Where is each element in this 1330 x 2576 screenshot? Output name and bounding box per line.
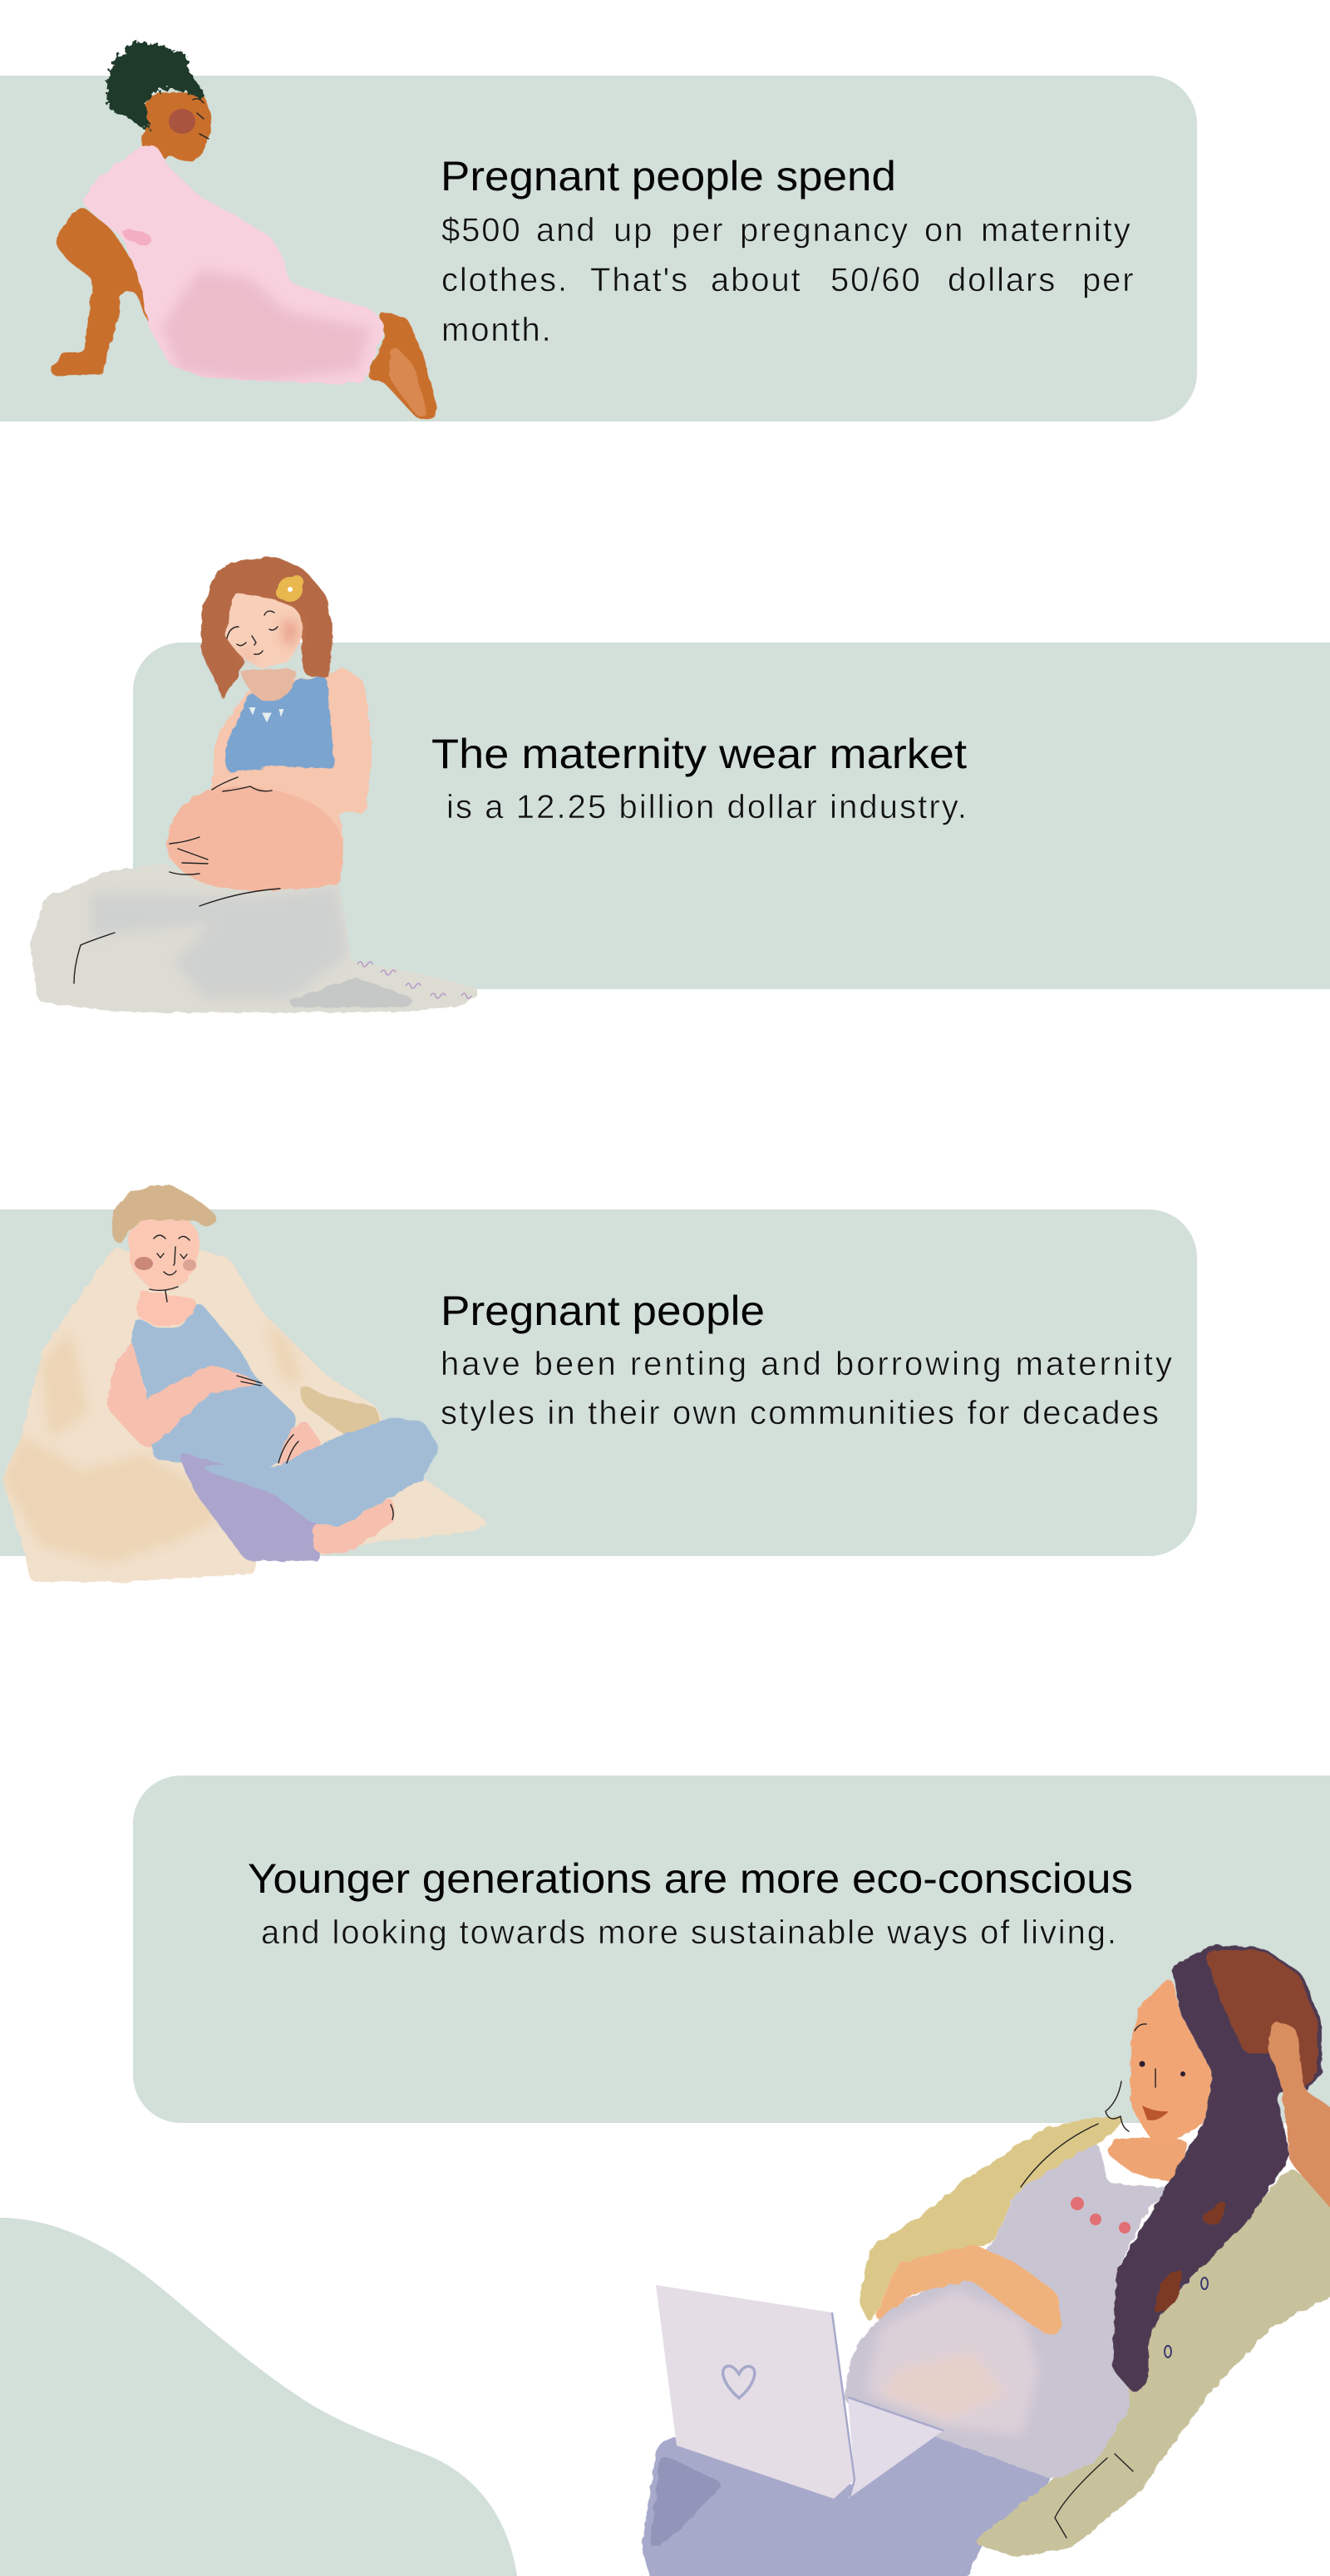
jacket buttons [1165, 2278, 1208, 2357]
face and jacket lines [1021, 2024, 1155, 2538]
illustration: pregnant person with laptop [642, 1945, 1330, 2576]
cheek [169, 109, 195, 134]
text: eco heading: Younger generations are more eco-conscious [248, 1855, 1133, 1902]
flower details [1071, 2197, 1130, 2234]
panel: eco-conscious background [133, 1776, 1330, 2123]
text: spending detail: on [924, 212, 964, 249]
face lines [193, 99, 209, 139]
text: spending detail: about [711, 262, 802, 298]
face and body lines [74, 611, 280, 983]
eyes [1139, 2061, 1185, 2076]
text: spending detail: pregnancy [740, 212, 909, 249]
text: eco detail: and looking towards more sustainable ways of living. [261, 1914, 1116, 1951]
face lines [150, 1235, 393, 1519]
text: spending detail: up [613, 212, 653, 249]
text: spending detail: 50/60 [830, 262, 922, 298]
text: community heading: Pregnant people [441, 1288, 765, 1334]
cheeks [135, 1257, 153, 1270]
panel: community background [0, 1209, 1197, 1556]
text: market detail: is a 12.25 billion dollar industry. [446, 789, 967, 825]
text: spending detail: dollars [948, 262, 1057, 298]
flower [276, 575, 303, 602]
text: community detail: have been renting and borrowing maternity [441, 1346, 1172, 1382]
text: spending detail: clothes. [441, 262, 569, 298]
text: spending detail: month. [441, 312, 553, 348]
text: spending detail: per [1082, 262, 1135, 298]
sock scribbles [357, 962, 471, 998]
text: spending detail: $500 [441, 212, 522, 249]
text: spending detail: and [536, 212, 596, 249]
laptop heart [723, 2366, 755, 2398]
panel: spending background [0, 76, 1197, 421]
text: market heading: The maternity wear market [431, 731, 967, 777]
illustration: person wrapped in blanket [2, 1184, 492, 1582]
text: spending detail: per [672, 212, 725, 249]
illustration: pregnant person in blue top [30, 556, 484, 1012]
mouth [1142, 2106, 1169, 2120]
decorative corner blob [0, 2218, 517, 2576]
text: spending detail: maternity [981, 212, 1132, 249]
text: community detail: styles in their own communities for decades [441, 1395, 1159, 1431]
panel: market background [133, 643, 1330, 989]
necklace hearts [249, 707, 283, 722]
illustration: pregnant person in pink dress [47, 37, 439, 421]
text: spending heading: Pregnant people spend [441, 153, 896, 199]
text: spending detail: That's [590, 262, 689, 298]
